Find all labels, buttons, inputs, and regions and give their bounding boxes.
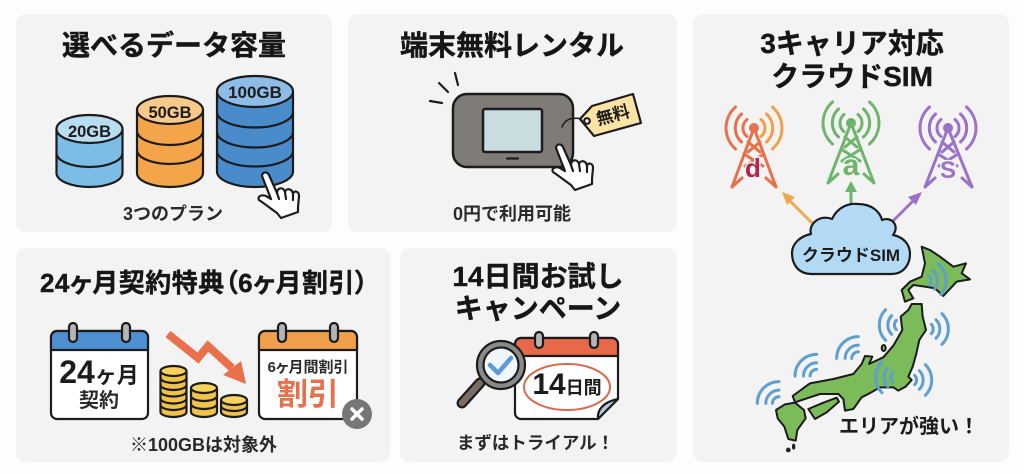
map: Japan [753,247,970,451]
tag text: free: 無料 [594,102,632,129]
icon: 100GB database cylinder [217,76,293,187]
cloud label: クラウドSIM [802,246,900,265]
panel: 14 day trial [400,248,677,462]
label: 20GB: 20GB [68,123,111,141]
icon: coin stacks [160,366,247,417]
icon: 14 day calendar [515,332,618,419]
panel: free device rental [348,14,677,232]
heading: free rental: 端末無料レンタル [400,30,624,61]
caption: three plans: 3つのプラン [123,204,223,224]
heading: three carriers: 3キャリア対応 [760,28,944,59]
icon: 50GB database cylinder [137,96,203,187]
heading: campaign: キャンペーン [455,293,621,324]
calendar text: 6 month discount: 6ヶ月間割引 [267,359,349,376]
icon: cloud [792,204,910,274]
calendar text: 24 months: 24ヶ月 [59,354,139,390]
arrow: to tower d [782,192,812,223]
carrier letter: a: a [843,149,860,182]
icon: tower a [823,102,879,183]
calendar text: discount: 割引 [277,377,339,412]
icon: pocket wifi device [453,94,582,167]
icon: spark lines [430,73,458,103]
label: 100GB: 100GB [228,83,282,102]
label: 50GB: 50GB [148,104,192,122]
caption: zero yen: 0円で利用可能 [453,204,571,224]
heading: 14 day trial: 14日間お試し [452,261,624,292]
icon: 20GB database cylinder [56,115,122,187]
signal waves over Japan [753,264,948,411]
icon: magnifying glass with check [462,341,525,403]
caption: strong area: エリアが強い！ [839,414,979,438]
heading: data capacity: 選べるデータ容量 [62,29,286,61]
caption: try first: まずはトライアル！ [457,433,614,453]
arrow: to tower s [892,192,922,222]
arrow: to tower a [845,181,857,207]
icon: falling zigzag arrow [168,334,246,384]
panel: data capacity [16,14,332,232]
heading: cloud SIM: クラウドSIM [771,61,933,92]
carrier letter: S: S [940,157,956,184]
icon: tower s [920,107,976,187]
caption: 100GB excluded: ※100GBは対象外 [130,435,277,455]
icon: 24 month calendar [51,323,148,419]
icon: pointing hand on device [552,144,593,190]
panel: 24 month contract benefit [16,248,390,462]
icon: tower d [726,107,782,187]
calendar text: 14 days: 14日間 [532,368,602,401]
icon: pointing hand [258,172,299,218]
calendar text: contract: 契約 [79,389,119,412]
carrier letter: d: d [745,153,761,183]
icon: grey cross badge [342,399,372,429]
icon: free price tag [580,94,641,136]
heading: 24 month benefit: 24ヶ月契約特典（6ヶ月割引） [40,268,368,298]
panel: three carrier cloud SIM [693,14,1009,462]
icon: discount calendar [259,323,357,419]
